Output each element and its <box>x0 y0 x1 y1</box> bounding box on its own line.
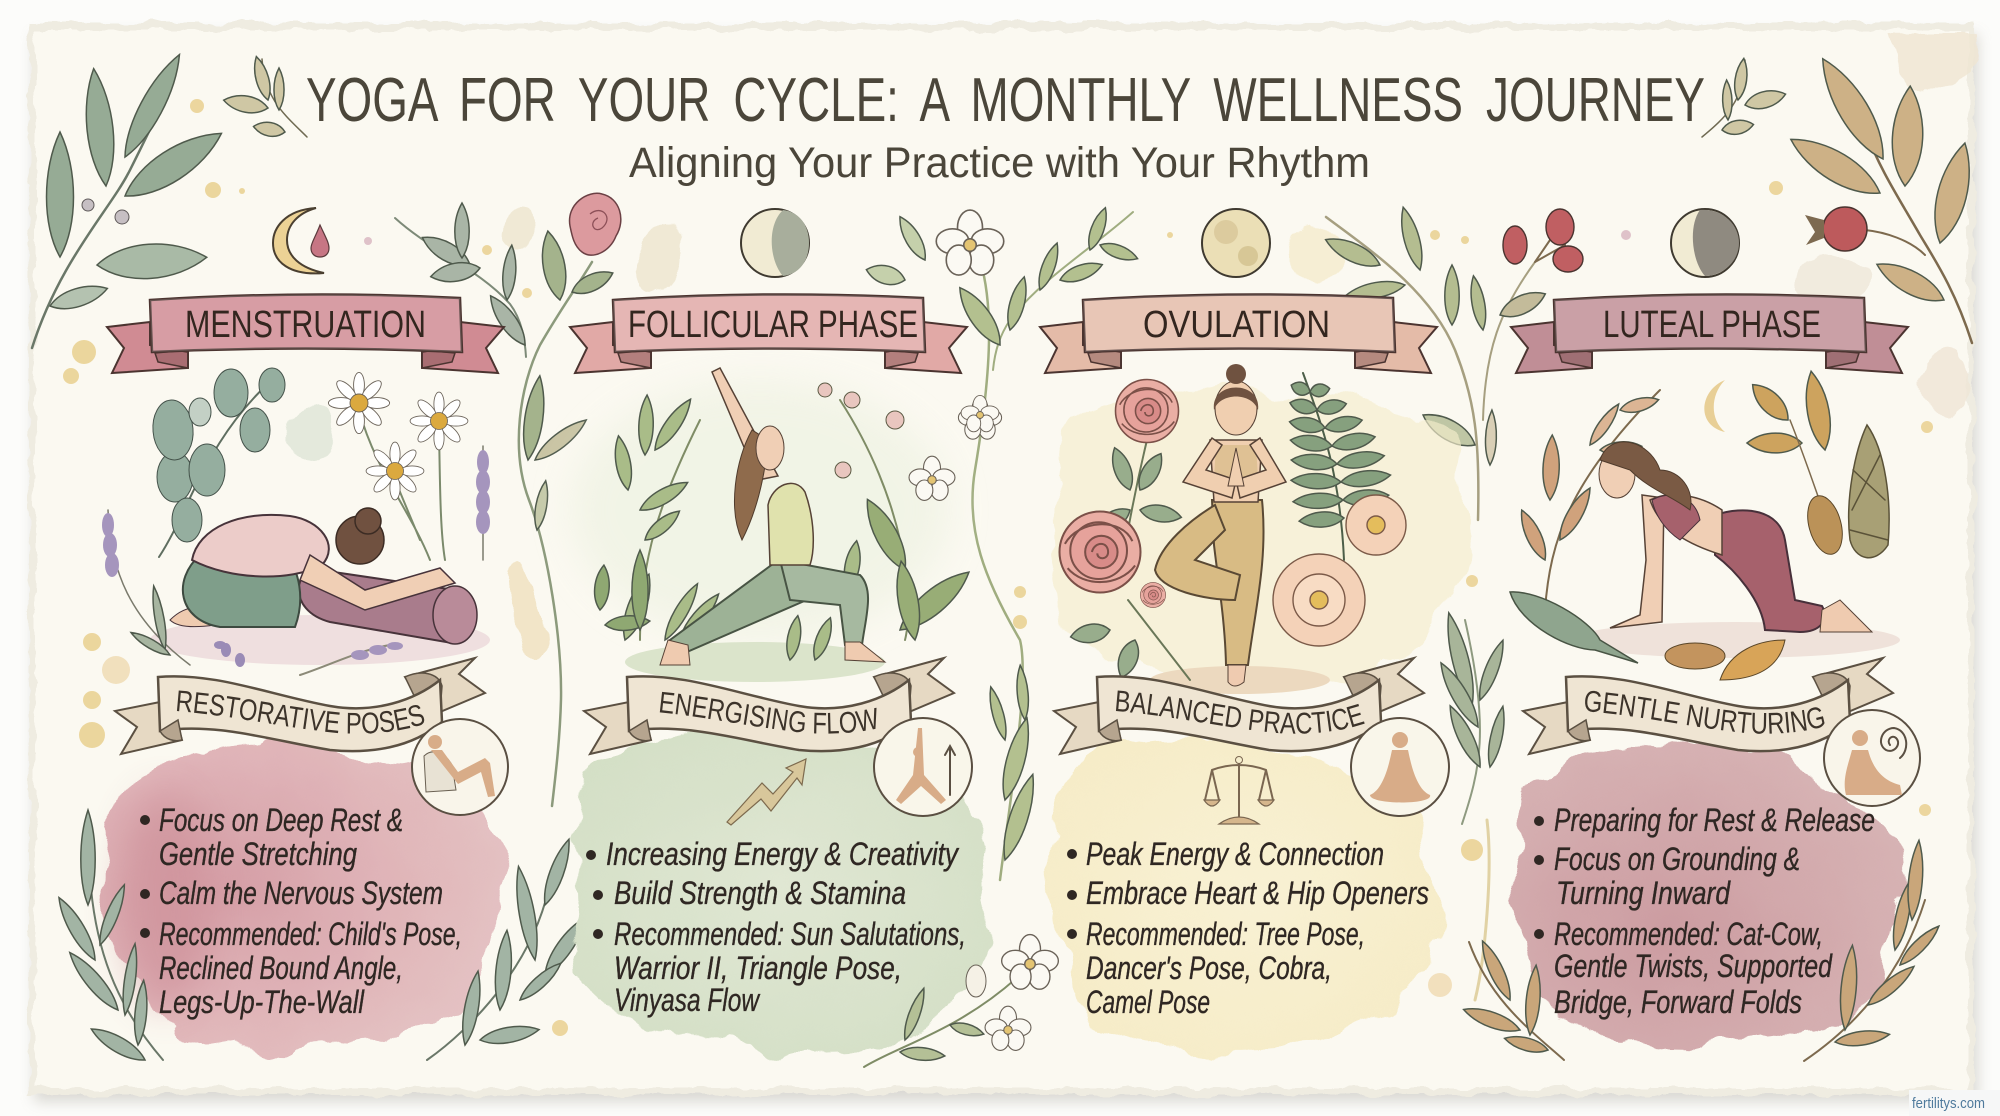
text: menstruation bullets: Recommended: Child's Pose, <box>159 916 462 952</box>
blob: ovulation text background <box>1052 738 1439 1045</box>
banner: follicular phase: FOLLICULAR PHASE <box>628 304 918 346</box>
panel: follicular phase <box>546 293 1059 1068</box>
banner: menstruation: MENSTRUATION <box>185 304 426 346</box>
panel: ovulation <box>1038 293 1472 1061</box>
text: ovulation bullets: Peak Energy & Connection <box>1086 836 1384 872</box>
vine between ovulation and luteal <box>1322 205 1583 1000</box>
text: luteal bullets: Preparing for Rest & Release <box>1554 802 1875 838</box>
illustration: lunge with arms raised <box>593 368 999 682</box>
text: menstruation bullets: Gentle Stretching <box>159 836 357 872</box>
ribbon: restorative poses <box>112 656 487 756</box>
icon: warrior pose <box>874 718 972 816</box>
vine between follicular and ovulation <box>864 206 1140 880</box>
text: menstruation bullets: Reclined Bound Angle, <box>159 950 403 986</box>
illustration: cat-cow with autumn leaves <box>1510 369 1900 680</box>
blob: menstruation text background <box>109 746 499 1053</box>
text: luteal bullets <box>1534 802 1875 1020</box>
ribbon: energising flow: ENERGISING FLOW <box>660 692 876 734</box>
text: menstruation bullets: Focus on Deep Rest & <box>159 802 403 838</box>
text: follicular bullets: Warrior II, Triangle Pose, <box>614 950 902 986</box>
banner: follicular phase <box>570 294 967 373</box>
phase moon: follicular <box>741 209 809 277</box>
ribbon: gentle nurturing <box>1520 656 1895 756</box>
vine between menstruation and follicular <box>395 193 621 806</box>
icon: rising arrow <box>727 759 806 825</box>
text: luteal bullets: Focus on Grounding & <box>1554 841 1800 877</box>
icon: meditating figure <box>1351 718 1449 816</box>
ribbon: energising flow <box>582 656 956 756</box>
text: ovulation bullets: Embrace Heart & Hip Openers <box>1086 875 1429 911</box>
text: menstruation bullets <box>140 802 462 1020</box>
blob: follicular text background <box>575 734 991 1051</box>
wreath: right autumn sprig <box>1804 840 1943 1061</box>
banner: menstruation <box>107 294 504 373</box>
text: ovulation bullets: Camel Pose <box>1086 984 1210 1020</box>
darker wash patch <box>120 790 210 1010</box>
banner: ovulation: OVULATION <box>1143 304 1330 346</box>
text: follicular bullets: Build Strength & Stamina <box>614 875 906 911</box>
phase moon: full <box>1202 209 1270 277</box>
text: ovulation bullets <box>1067 836 1429 1020</box>
text: follicular bullets: Vinyasa Flow <box>614 982 760 1018</box>
text: luteal bullets: Gentle Twists, Supported <box>1554 948 1833 984</box>
text: luteal bullets: Turning Inward <box>1556 875 1731 911</box>
golden dots <box>63 99 1933 1036</box>
banner: luteal phase: LUTEAL PHASE <box>1603 304 1821 346</box>
wreath: left autumn sprig <box>1461 938 1564 1060</box>
text: luteal bullets: Recommended: Cat-Cow, <box>1554 916 1823 952</box>
background paint stains <box>284 28 1968 660</box>
icon: restorative pose <box>412 719 508 815</box>
subtitle: Aligning Your Practice with Your Rhythm <box>629 139 1370 187</box>
watermark: fertilitys.com <box>1912 1095 1985 1112</box>
text: menstruation bullets: Legs-Up-The-Wall <box>159 984 365 1020</box>
illustration: tree pose with florals <box>1060 364 1406 694</box>
rosehip top right <box>1805 207 1925 255</box>
ribbon: gentle nurturing: GENTLE NURTURING <box>1585 690 1824 734</box>
panel: menstruation <box>58 293 578 1061</box>
text: follicular bullets: Recommended: Sun Salutations, <box>614 916 966 952</box>
phase moon: luteal <box>1671 209 1739 277</box>
ribbon: balanced practice <box>1052 656 1426 756</box>
panel: luteal phase <box>1462 293 1940 1062</box>
ribbon: restorative poses: RESTORATIVE POSES <box>176 690 424 734</box>
phase moon: menstruation crescent and drop <box>273 208 329 273</box>
text: menstruation bullets: Calm the Nervous System <box>159 875 443 911</box>
blob: luteal text background <box>1512 745 1898 1049</box>
illustration: child's pose with herbs <box>102 368 490 675</box>
icon: balance scales <box>1204 756 1274 824</box>
large sage branch top left <box>32 49 230 348</box>
watermark <box>1909 1090 2000 1116</box>
faint wash behind lunge figure <box>570 380 950 640</box>
icon: seated figure with spiral <box>1824 710 1920 806</box>
text: ovulation bullets: Recommended: Tree Pose, <box>1086 916 1365 952</box>
banner: luteal phase <box>1511 294 1908 373</box>
text: luteal bullets: Bridge, Forward Folds <box>1554 984 1802 1020</box>
wreath: left sage sprig <box>53 810 163 1067</box>
ribbon: balanced practice: BALANCED PRACTICE <box>1116 690 1365 734</box>
sprig with white flowers <box>864 935 1058 1067</box>
text: ovulation bullets: Dancer's Pose, Cobra, <box>1086 950 1332 986</box>
wreath: right sage sprig <box>427 837 591 1060</box>
text: follicular bullets: Increasing Energy & Creativity <box>606 836 960 872</box>
text: follicular bullets <box>586 836 966 1018</box>
large brown branch top right <box>1783 51 1979 343</box>
banner: ovulation <box>1040 294 1437 373</box>
watercolor wash behind figure <box>1047 385 1457 684</box>
title sprig left <box>222 55 307 139</box>
title sprig right <box>1702 58 1788 137</box>
